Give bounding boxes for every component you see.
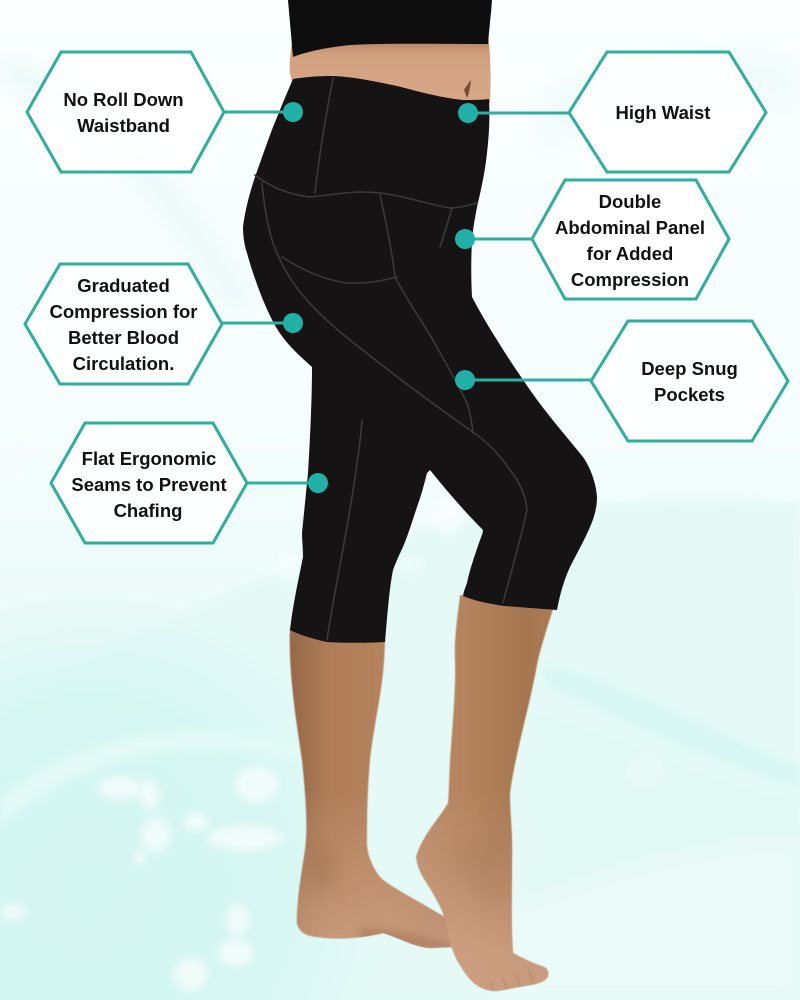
label: Pockets [654, 384, 725, 405]
label: Compression for [49, 301, 198, 322]
connector and dot [224, 102, 303, 122]
label: High Waist [616, 102, 710, 123]
connector and dot [222, 313, 303, 333]
connector and dot [458, 103, 569, 123]
label: Flat Ergonomic [82, 448, 216, 469]
connector and dot [247, 473, 328, 493]
hexagon [25, 264, 222, 384]
back leg skin and foot [285, 628, 460, 955]
waist skin [290, 34, 491, 103]
label: Waistband [77, 115, 170, 136]
label: Circulation. [73, 353, 174, 374]
callout: Flat Ergonomic Seams [51, 423, 328, 543]
hexagon [27, 52, 224, 172]
connector and dot [455, 370, 591, 390]
label: Deep Snug [641, 358, 738, 379]
connector and dot [455, 229, 532, 249]
hexagon [569, 52, 766, 172]
callout: Deep Snug Pockets [455, 321, 788, 441]
label: Double [599, 191, 661, 212]
callout: High Waist [458, 52, 766, 172]
label: Compression [571, 269, 689, 290]
label: Graduated [77, 275, 170, 296]
hexagon [532, 180, 729, 299]
label: Seams to Prevent [71, 474, 227, 495]
leggings [243, 76, 597, 643]
label: for Added [587, 243, 673, 264]
callout: No Roll Down Waistband [27, 52, 303, 172]
callout: Double Abdominal Panel [455, 180, 729, 299]
front leg skin and foot [410, 595, 555, 995]
callout: Graduated Compression [25, 264, 303, 384]
hexagon [591, 321, 788, 441]
sports bra top [288, 0, 492, 57]
label: Chafing [114, 500, 182, 521]
label: Better Blood [68, 327, 179, 348]
hexagon [51, 423, 247, 543]
leggings seams [255, 78, 527, 640]
label: Abdominal Panel [555, 217, 705, 238]
model figure [243, 0, 597, 995]
toes [490, 970, 534, 990]
label: No Roll Down [63, 89, 184, 110]
